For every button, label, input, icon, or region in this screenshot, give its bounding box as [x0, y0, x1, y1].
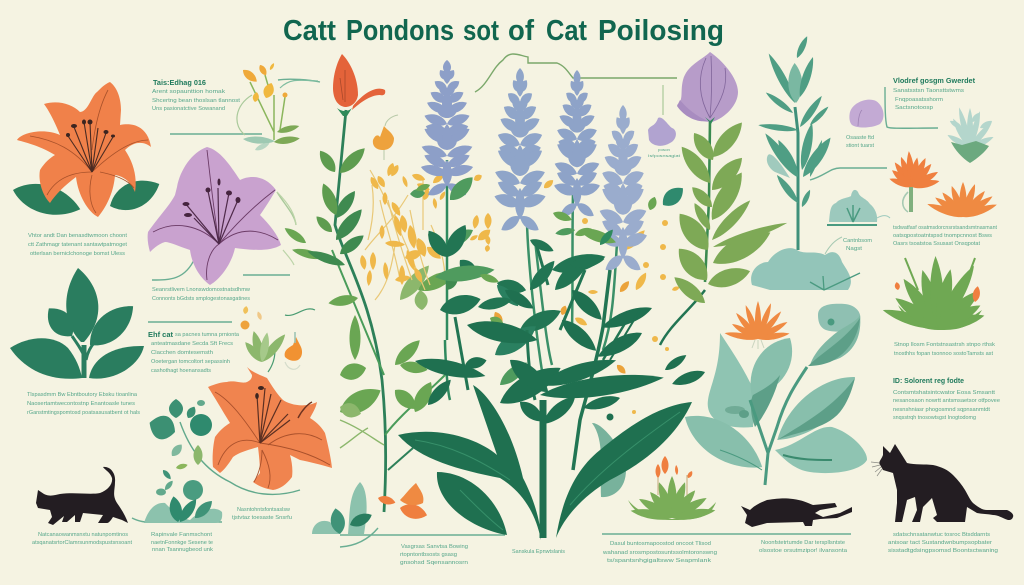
caption: orange lily — [28, 233, 127, 257]
teal leafy stalk — [758, 35, 835, 250]
small yellow-flower plant, top — [237, 62, 318, 152]
note: top right: Sactsnotoosp — [895, 105, 933, 111]
note: solorent: nesnshniasr phogosmnd sqpnsanmtdt — [893, 407, 990, 413]
small plant with orange flowers, bottom — [312, 482, 429, 535]
green grass clump, right — [881, 256, 986, 333]
pale sprig plant — [946, 107, 995, 163]
small teal bush — [825, 190, 890, 254]
caption: orange sprays: Oasrs tsoatstoa Ssusast Onsqpotat — [893, 241, 980, 247]
title: Catt — [283, 15, 336, 47]
large teal bush — [751, 248, 860, 290]
caption: top left note: Tais:Edhag 016 — [153, 80, 206, 87]
caption: mound plant: nnan Tsannugbeod unk — [152, 547, 213, 553]
connector lines — [132, 54, 938, 547]
caption: black cat: atsqanatsrtorClamrsunmodspustsnsoant — [32, 540, 132, 546]
caption: crouching cat: Noonfstetrtumde Dar terspllsntste — [761, 540, 845, 546]
note: solorent — [893, 378, 1000, 421]
caption: center right: wahanad srosmpostosuntssolmtoronswng — [602, 550, 717, 556]
small orange-yellow bud — [373, 115, 398, 160]
caption: cat note: anteatmasdane Secda Sft Frecs — [151, 341, 233, 347]
small grass with yellow flowers — [240, 306, 315, 365]
note: solorent: ID: Solorent reg fodte — [893, 378, 964, 385]
caption: center right — [602, 541, 717, 564]
caption: purple lily: Seanrstlivem Lnonswdomostnatsdhmw — [152, 287, 251, 293]
caption: sitting cat — [888, 532, 998, 554]
black cat crouching — [741, 498, 852, 527]
caption: orange lily: Vhtor andt Dan benasdtwmoon choont — [28, 233, 127, 239]
caption: top left note: Shcertng bean thoslsan tlannost — [152, 98, 240, 104]
caption: cat note: Ehf cat — [148, 332, 174, 339]
caption: cat note: cashothagt hoenansadts — [151, 368, 211, 374]
note: top right — [893, 78, 976, 111]
caption: cat note: sa pacnes tumna prnionta — [175, 332, 240, 338]
caption: bottom lily: Nasntohntsfontsaslsw — [237, 507, 291, 513]
small plant on mound — [144, 462, 222, 525]
caption: pale purple bud: Osaaste ftd — [846, 135, 874, 141]
orange lily, top left — [9, 82, 165, 223]
caption: center right: ts/spantsnhgigaltsww Seapmlank — [607, 558, 711, 564]
caption: orange lily: otterlsan berniclchonoge bomst Uless — [30, 251, 125, 257]
caption: center left: Vasgrsas Sanvtsa Bowing — [401, 544, 468, 550]
caption: green plant: rGanstmtingspomtosd poatsasusatbent ot hals — [27, 410, 140, 416]
title: sot — [463, 15, 499, 47]
central plant dark leaves — [413, 285, 707, 538]
caption: cat note — [148, 332, 240, 374]
pale teal leaf behind dark leaf — [592, 423, 626, 497]
caption: sitting cat: sisstadtgdsingpsomsd Boontsctwaning — [888, 548, 998, 554]
caption: grass clump — [894, 342, 995, 357]
caption: purple lily: Connonts bGdsts smplogestonasgatines — [152, 296, 250, 302]
orange spray flowers — [724, 151, 998, 349]
yellow flower scatter — [359, 162, 680, 414]
large dark leaves at base — [398, 385, 692, 540]
caption: mound plant — [151, 532, 213, 553]
caption: grass clump: tnosthhs fopan tsonnoo sostoTamsts ast — [894, 351, 993, 357]
caption: bottom lily: tjstvtaz toesaste Snsrfu — [232, 515, 292, 521]
caption: mound plant: Rapinvale Fanmschont — [151, 532, 212, 538]
caption: green plant: Tlspasdmm Bw Ebntboutory Ebsku tioanlina — [27, 392, 138, 398]
caption: small purple blossom: Isfposnsagiat — [648, 153, 681, 158]
caption: center left: rtopntontbsosts gsasg — [400, 552, 457, 558]
small orange blossom — [285, 332, 302, 369]
caption: grass clump: Stnop llosm Fontstnsastrsh stnpo rthsk — [894, 342, 995, 348]
caption: center right: Dasul buntosmapoostod oncoot Tlisod — [610, 541, 711, 547]
caption: pale purple bud — [846, 135, 874, 149]
title: Cat — [546, 15, 587, 47]
title: Poilosing — [598, 15, 724, 47]
caption: green plant: Naosertamtwecontostnp Enantoasle tunes — [27, 401, 135, 407]
caption: orange sprays: tsdwatfasf osatmsdorcnsrstsandsmtnasmant — [893, 225, 997, 231]
title — [283, 15, 724, 47]
note: top right: Vlodref gosgm Gwerdet — [893, 78, 976, 85]
caption: sitting cat: anisoar tact Sustandwnbumpsopbater — [888, 540, 992, 546]
note: solorent: Contsmtshatsintcwator Eosa Smsantt — [893, 390, 995, 396]
caption: sitting cat: sdatschnsatanwtuc tosroc Btsddarnts — [893, 532, 990, 538]
small purple blossom — [648, 85, 676, 146]
caption: center left: gnsohsd Sqensannosrn — [400, 560, 468, 566]
caption: cat note: Ooetergan tomcoltort sepassinh — [151, 359, 230, 365]
caption: top left note: Uns pasionatctive Sowanand — [152, 106, 225, 112]
blue flower spikes — [420, 60, 648, 400]
caption: center: Sanskula Epnwtslanis — [512, 549, 565, 555]
caption: crouching cat — [759, 540, 848, 554]
central plant mid leaves — [410, 172, 705, 470]
caption: small teal bush: Cantnbsom — [843, 238, 872, 244]
title: of — [508, 15, 534, 47]
teal leaf plant, right — [676, 304, 867, 485]
purple bulb flower plant — [670, 52, 788, 308]
caption: orange sprays: oatsqpostoatntspsd tnompcnnost Bsws — [893, 233, 992, 239]
black cat walking — [36, 467, 128, 525]
note: top right: Fnqpoasatsshorm — [895, 97, 943, 103]
caption: mound plant: naetnFonnkge Sesene te — [151, 540, 213, 546]
black cat sitting, right — [871, 444, 1013, 522]
title: Pondons — [346, 15, 454, 47]
caption: black cat: Natcanaowanmsnxtu natunpomtinos — [38, 532, 128, 538]
pale purple bud — [849, 100, 883, 128]
caption: purple lily — [152, 287, 251, 302]
caption: small teal bush: Nagst — [846, 246, 862, 252]
caption: black cat — [32, 532, 132, 546]
caption: top left note: Arent sopaunttion homak — [152, 89, 225, 95]
orange lily, bottom — [208, 350, 332, 490]
eucalyptus sprig and vine — [146, 399, 300, 494]
caption: orange sprays — [893, 225, 997, 247]
green leafy plant, left — [10, 268, 144, 379]
caption: pale purple bud: stiont tuarst — [846, 143, 874, 149]
caption: cat note: Clacchen domtesemsth — [151, 350, 213, 356]
caption: small purple blossom: poson — [658, 147, 670, 152]
green grass clump, bottom center — [628, 456, 716, 522]
caption: crouching cat: olsostoe orsutmzipor! ilvansonta — [759, 548, 848, 554]
note: solorent: nesanosaon nowrtt antsmsaetsor otfpovee — [893, 398, 1000, 404]
caption: center left — [400, 544, 468, 566]
caption: small purple blossom — [648, 147, 681, 158]
caption: green plant — [27, 392, 140, 416]
caption: small teal bush — [843, 238, 872, 252]
left tall plant with red tulip — [282, 54, 459, 512]
caption: orange lily: ctt Zathmagr tatenant santawtpatmoget — [28, 242, 127, 248]
caption: top left note — [152, 80, 240, 112]
caption: bottom lily — [232, 507, 292, 521]
purple lily — [148, 147, 296, 285]
note: top right: Sanatsstsn Taonsttstwms — [893, 88, 964, 94]
note: solorent: snqsstrqh tnosowtsgst Inogtodomg — [893, 415, 976, 421]
